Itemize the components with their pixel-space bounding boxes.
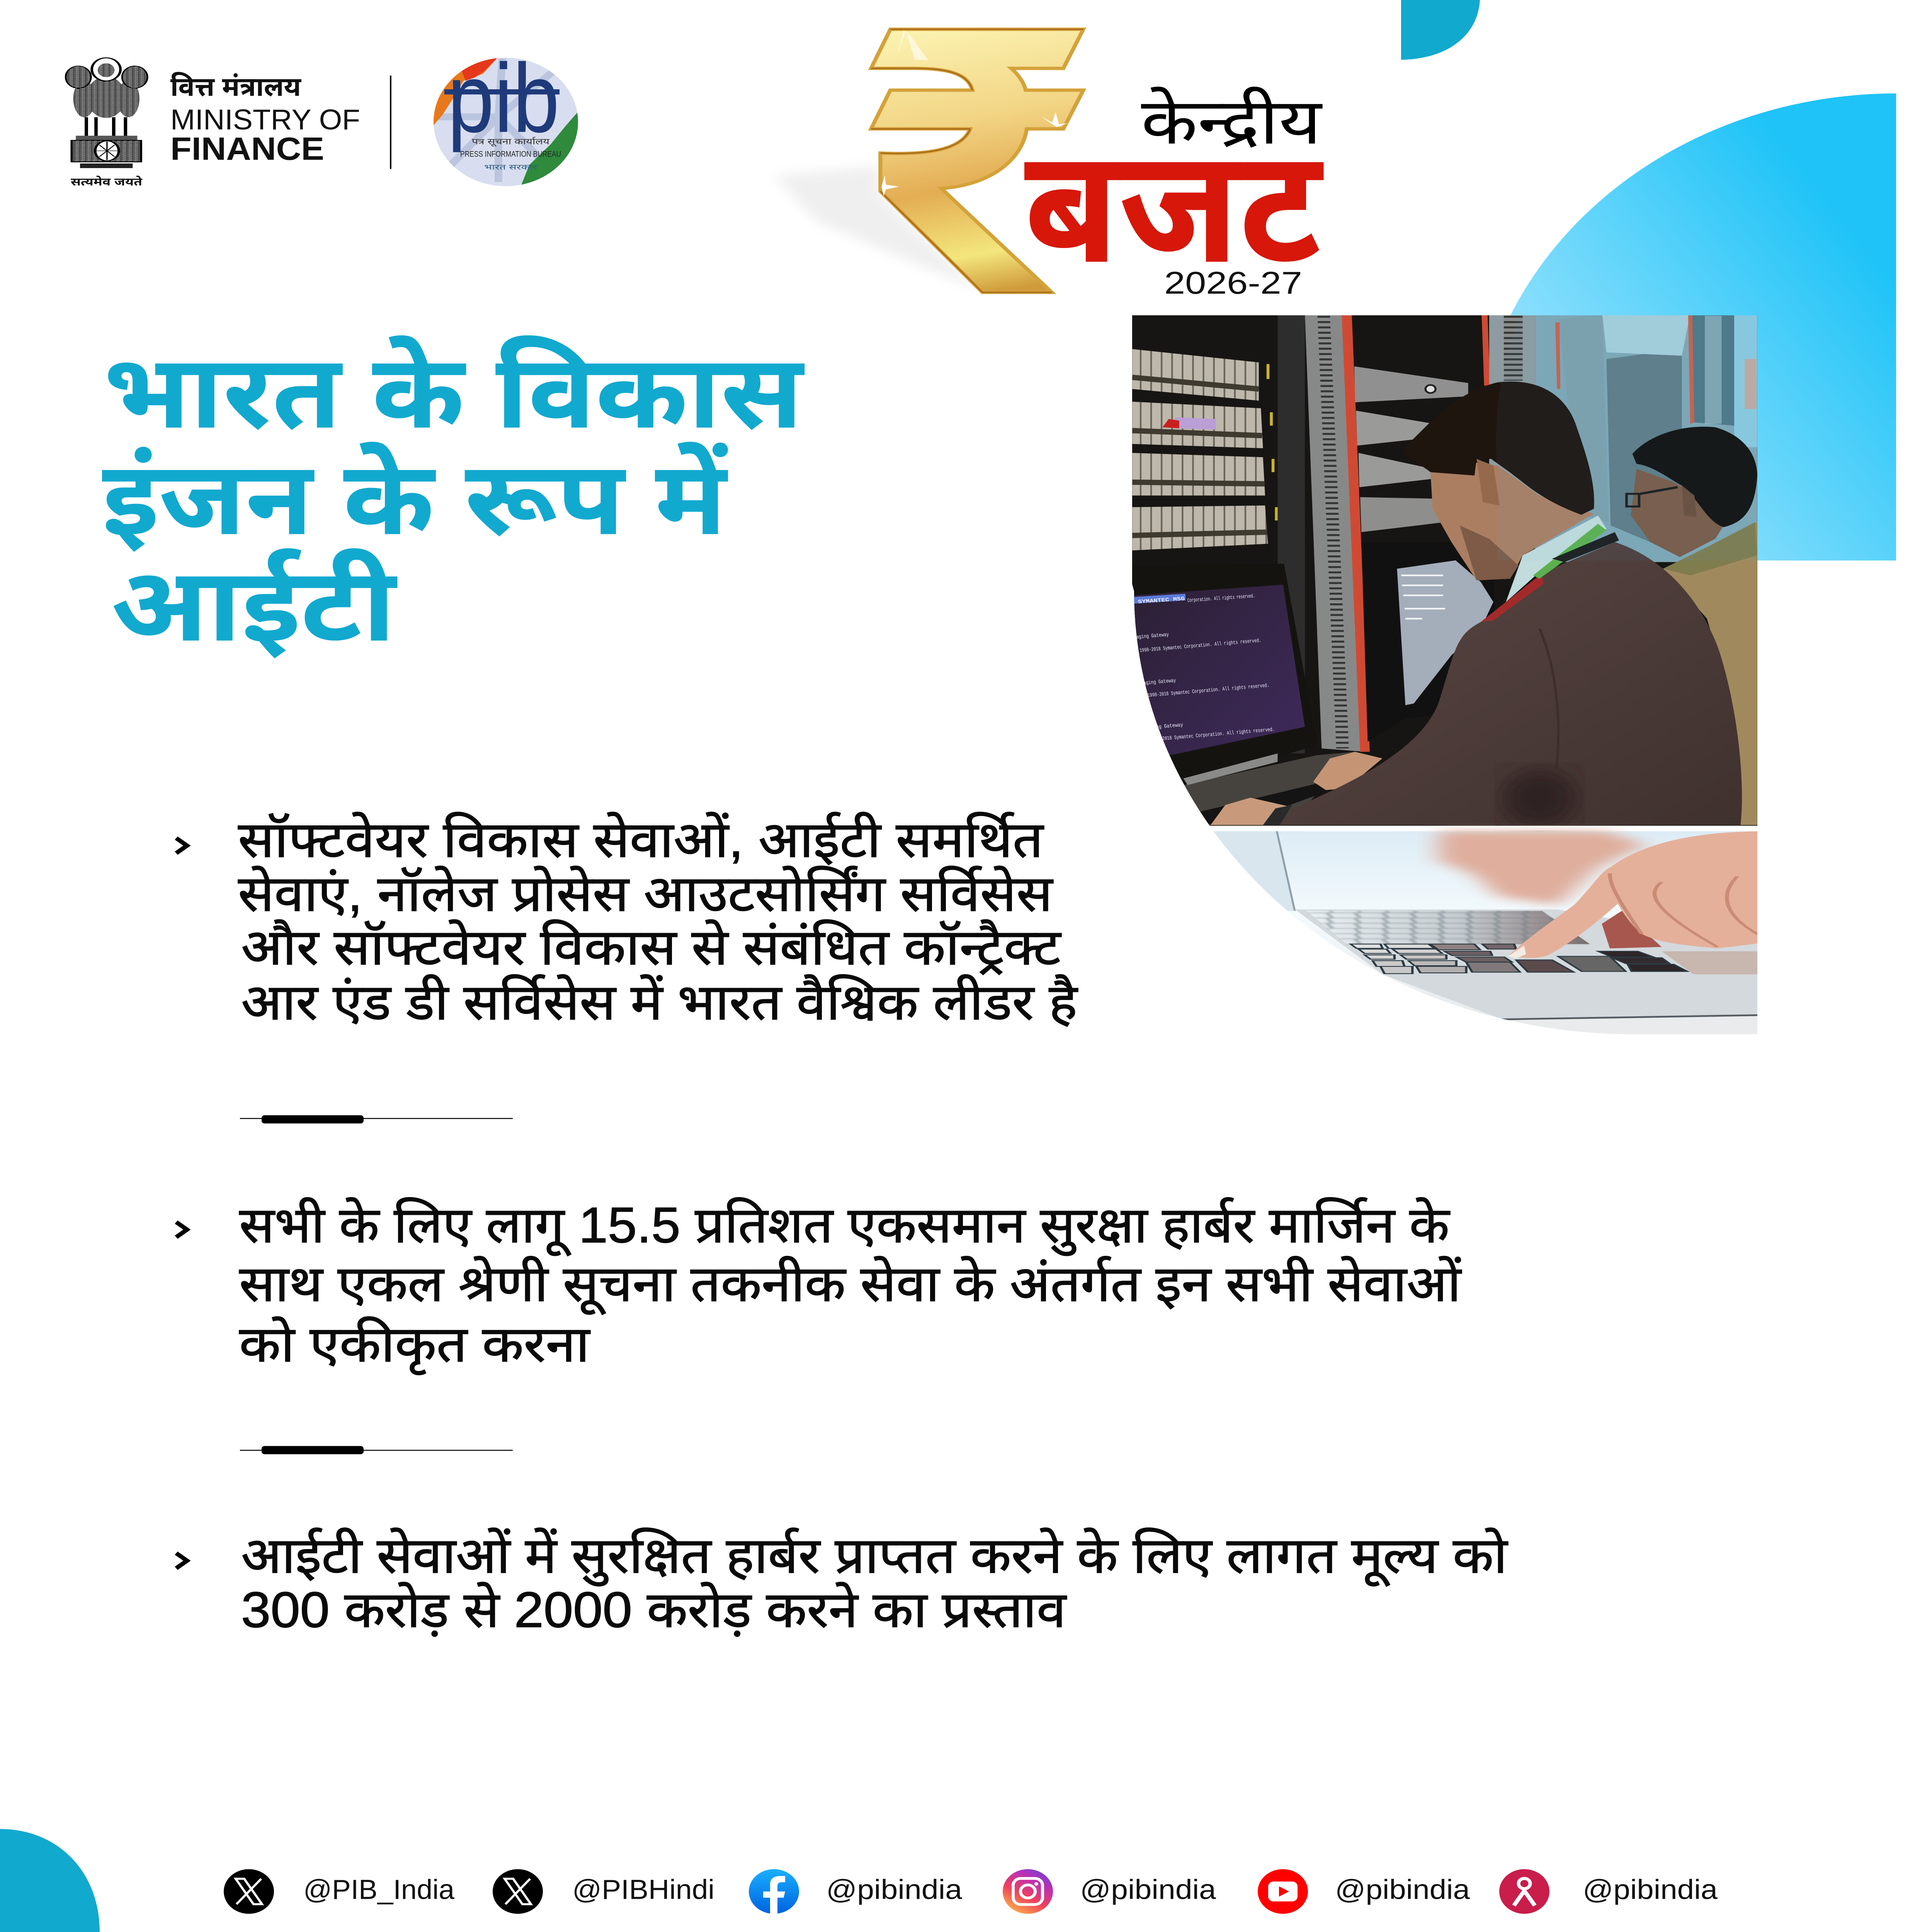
monitor with terminal text: 1998-2018 Symantec Corporation. All rights reserved. [1139,638,1262,654]
text lines: 300 करोड़ से 2000 करोड़ करने का प्रस्ताव [241,1582,1067,1638]
icon: ribbon figure [1499,1869,1549,1914]
monitor with terminal text: 2018 Symantec Corporation. All rights reserved. [1162,726,1275,742]
monitor with terminal text [1132,564,1317,785]
hand and pointing finger [1508,831,1765,959]
text: satyameva jayate: सत्यमेव जयते [71,175,143,188]
icon: chevron [176,838,187,853]
text lines [238,812,1078,1030]
text lines: सभी के लिए लागू 15.5 प्रतिशत एकसमान सुरक्षा हार्बर मार्जिन के [239,1197,1451,1257]
text lines [239,1197,1462,1375]
photo: engineers at server rack [1129,314,1762,828]
logo: Ministry of Finance [66,58,360,188]
main engineer [1263,381,1742,828]
text lines [241,1528,1508,1638]
text: pib wordmark: pib [447,44,560,153]
text lines: आर एंड डी सर्विसेस में भारत वैश्विक लीडर है [241,974,1078,1030]
desk and keyboard [1184,752,1495,825]
icon: Facebook [749,1869,799,1914]
blurred back hand [1438,831,1646,905]
monitor with terminal text: SYMANTEC MSG [1138,596,1185,605]
text: year: 2026-27 [1164,265,1302,301]
title line 1: भारत के विकास [103,334,806,450]
bullet 1 [176,812,1078,1030]
handle: pibindia: @pibindia [1080,1874,1216,1905]
monitor with terminal text: aging Gateway [1136,631,1169,640]
photo: typing on laptop [1207,831,1769,1039]
text lines: साथ एकल श्रेणी सूचना तकनीक सेवा के अंतर्गत इन सभी सेवाओं [239,1256,1462,1315]
icon: YouTube [1258,1869,1308,1914]
handle: pibindia: @pibindia [826,1874,963,1905]
divider 1 [240,1115,513,1124]
second engineer [1626,427,1757,825]
text lines: को एकीकृत करना [239,1316,590,1375]
logo: Press Information Bureau [434,58,578,186]
icon: national emblem [66,58,148,168]
handle: pibindia: @pibindia [1583,1874,1718,1905]
title line 3: आईटी [111,547,398,663]
handle: pibindia: @pibindia [1335,1874,1470,1905]
monitor with terminal text: Corporation. All rights reserved. [1187,593,1255,604]
text: bharat sarkar: भारत सरकार [484,163,537,172]
handle: PIBHindi: @PIBHindi [572,1874,714,1905]
monitor with terminal text: aging Gateway [1143,677,1176,686]
rack column [1277,314,1370,753]
bullet 2 [176,1197,1462,1375]
text: press information bureau: PRESS INFORMATION BUREAU [460,149,561,158]
icon: X [224,1869,274,1914]
icon: gold rupee symbol [775,29,1083,293]
windows background [1489,314,1757,562]
monitor with terminal text: 1998-2018 Symantec Corporation. All rights reserved. [1147,682,1270,699]
text: patra suchna karyalay: पत्र सूचना कार्यालय [472,137,550,147]
disk shelves [1132,349,1276,550]
title [102,334,806,663]
icon: Instagram [1003,1869,1053,1914]
handle: PIB_India: @PIB_India [303,1874,455,1905]
text: FINANCE: FINANCE [170,130,324,167]
decorative corner: top teal quarter [1401,0,1480,60]
photo: IT engineers and keyboard [1128,94,1769,1039]
decorative shape: large blue quarter circle [1473,94,1896,561]
bullet 3 [176,1528,1508,1638]
text lines: और सॉफ्टवेयर विकास से संबंधित कॉन्ट्रैक्ट [241,919,1061,975]
servers [1354,314,1498,742]
text: MINISTRY OF: MINISTRY OF [170,103,360,136]
blue tint over upper right of photo [1496,94,1757,561]
icon: X [493,1869,543,1914]
text: budget: बजट [1024,117,1325,296]
text lines: आईटी सेवाओं में सुरक्षित हार्बर प्राप्तत करने के लिए लागत मूल्य को [241,1528,1508,1587]
keyboard keys [1350,944,1687,974]
budget logo [775,29,1325,301]
text lines: सेवाएं, नॉलेज प्रोसेस आउटसोर्सिंग सर्विसेस [238,866,1054,922]
decorative corner: bottom-left teal quarter [0,1829,100,1932]
icon: chevron [176,1553,187,1568]
icon: chevron [176,1222,187,1237]
text: ministry name in Hindi: वित्त मंत्रालय [170,71,301,102]
social media row [224,1869,1718,1914]
laptop deck [1295,910,1765,1019]
monitor with terminal text: ng Gateway [1156,722,1184,730]
text: kendriya: केन्द्रीय [1141,87,1323,157]
divider 2 [240,1446,513,1454]
text lines: सॉफ्टवेयर विकास सेवाओं, आईटी समर्थित [238,812,1044,868]
title line 2: इंजन के रूप में [102,441,729,556]
